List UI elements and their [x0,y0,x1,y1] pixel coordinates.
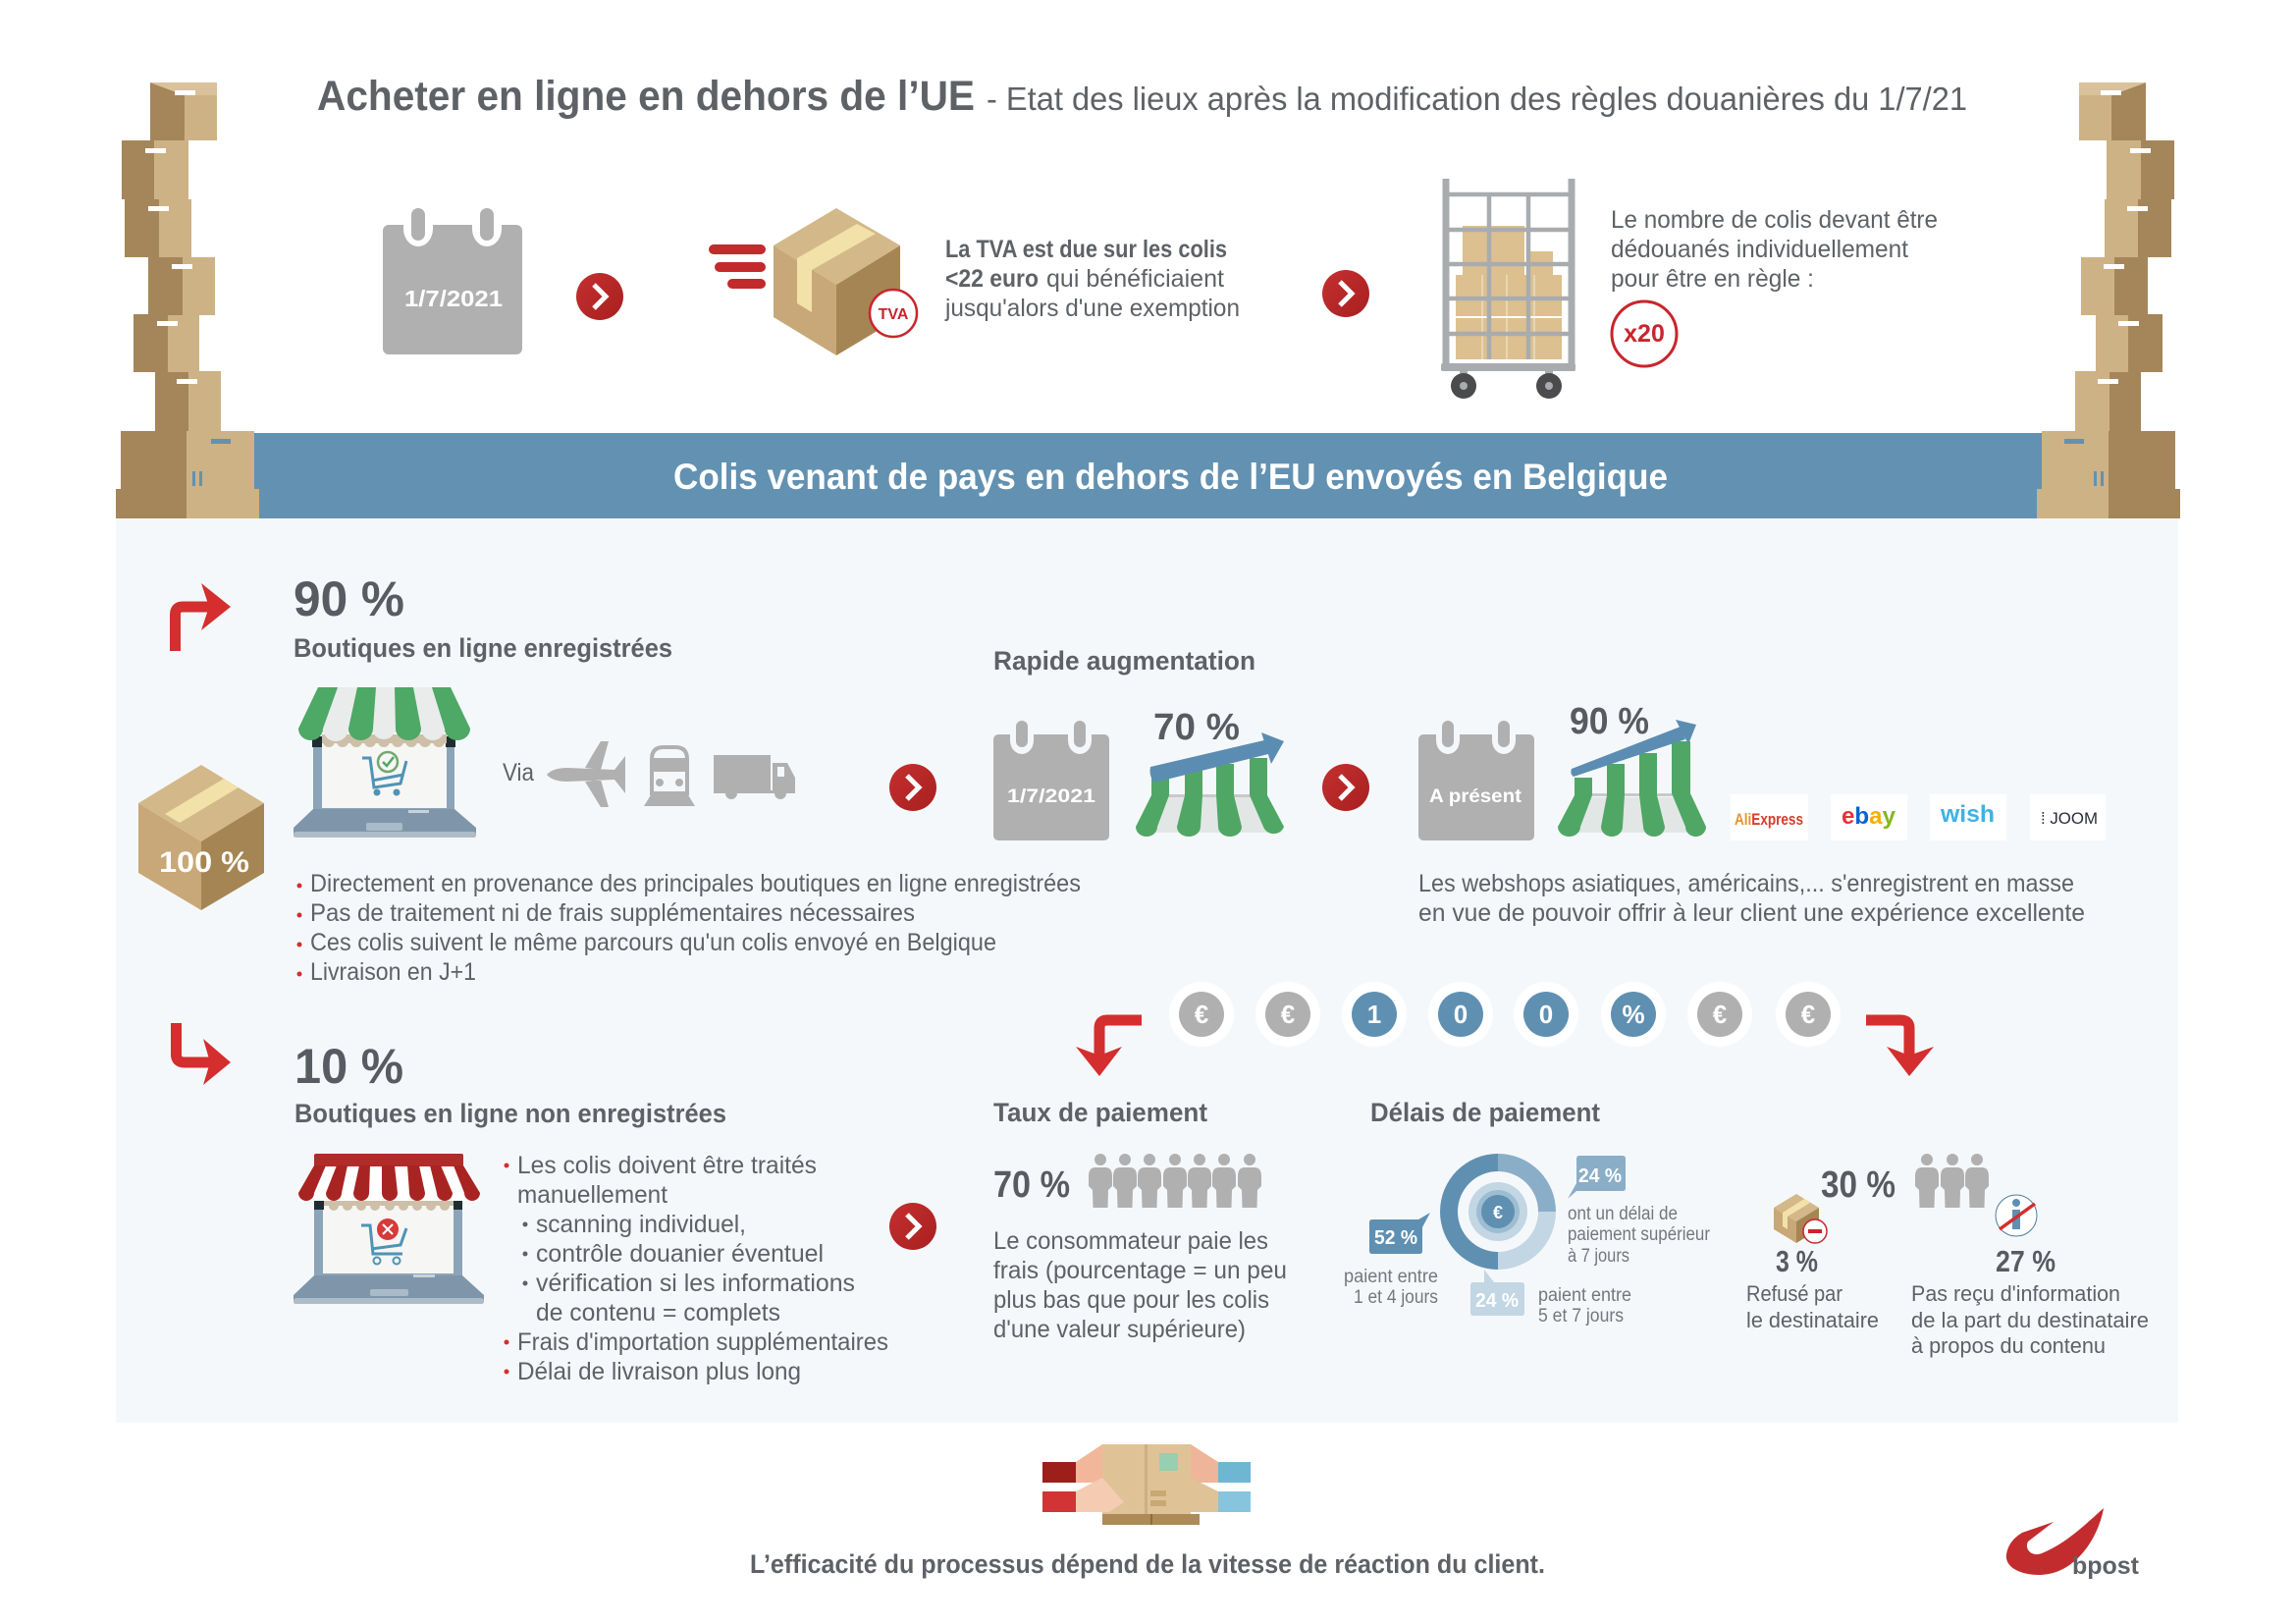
stat: 30 % people: 30 % [1821,1164,1896,1206]
arrow: red down then right [177,1023,231,1085]
stat: 27 % no information: Pas reçu d'information [1911,1281,2120,1306]
icon: calendar 1/7/2021: 1/7/2021 [404,286,503,311]
callout: 24 % longer than 7 days: 24 % [1578,1165,1622,1187]
text: list unregistered [505,1152,888,1385]
block: taux de paiement: 70 % [993,1164,1070,1206]
stat: 3 % refused: Refusé par [1746,1281,1842,1306]
heading: 90 % registered shops [294,571,672,663]
coins: 100 % row [1169,982,1841,1047]
stat: 30 % people [1821,1154,1989,1208]
text: nombre de colis: dédouanés individuellement [1611,236,1908,263]
icon: laptop store red awning [294,1154,484,1304]
logos: webshops: wish [1940,801,1995,828]
title: - Etat des lieux après la modification des règles douanières du 1/7/21 [987,81,1967,117]
text: list registered: Directement en provenance des principales boutiques en ligne enregistrées [310,870,1081,897]
text: list unregistered: Délai de livraison plus long [517,1358,801,1385]
callout: 52 %: paient entre [1344,1267,1438,1287]
icon: awning 70 % with arrow [1136,707,1284,837]
text: list unregistered: manuellement [517,1181,667,1209]
coins: 100 % row: € [1281,1000,1295,1029]
block: taux de paiement: d'une valeur supérieure) [993,1316,1246,1343]
heading: rapide augmentation: Rapide augmentation [993,646,1255,676]
text: webshops asiatiques [1418,870,2085,927]
icon: plane [547,741,625,807]
banner: colis venant de pays en dehors de l'EU: Colis venant de pays en dehors de l’EU envoyés en Belgique [673,457,1668,497]
block: taux de paiement [993,1098,1287,1343]
icon: speed lines [709,244,766,289]
icon: calendar a present [1418,721,1534,840]
callout: 52 % [1344,1213,1438,1308]
heading: delais de paiement: Délais de paiement [1370,1098,1600,1127]
coins: 100 % row: 0 [1539,1000,1553,1029]
coins: 100 % row: € [1713,1000,1727,1029]
banner: colis venant de pays en dehors de l'EU [250,433,2047,518]
stat: 27 % no information: 27 % [1996,1244,2056,1278]
icon: parcel 100 % [138,765,264,910]
icon: awning 90 % with arrow [1558,701,1706,837]
coins: 100 % row: € [1195,1000,1208,1029]
icon: laptop store green awning [294,687,476,838]
callout: 24 % longer than 7 days: paiement supérieur [1568,1224,1711,1245]
icon: right stack of boxes [2037,82,2180,518]
text: TVA explanation: La TVA est due sur les colis [945,236,1227,263]
icon: train [644,747,695,806]
logos: webshops: ebay [1842,803,1896,830]
chart: payment delay donut [1440,1154,1556,1270]
text: list unregistered: vérification si les informations [536,1270,855,1297]
callout: 52 %: 52 % [1374,1227,1417,1249]
arrow: red down-right [1866,1020,1934,1076]
icon: truck [714,755,795,799]
text: TVA explanation: <22 euro [945,265,1039,293]
arrow: red circle 5 [889,1203,936,1250]
icon: parcel 100 %: 100 % [159,846,249,879]
stat: 27 % no information [1911,1244,2149,1358]
logos: webshops: ⁞ JOOM [2041,809,2098,828]
text: list registered: Livraison en J+1 [310,958,476,986]
stat: 3 % refused: le destinataire [1746,1308,1879,1332]
icon: calendar 1/7/2021 small [993,721,1109,840]
callout: 24 % longer than 7 days: à 7 jours [1568,1246,1629,1267]
stat: 27 % no information: à propos du contenu [1911,1333,2106,1358]
heading: 90 % registered shops: Boutiques en ligne enregistrées [294,633,672,663]
icon: awning 90 % with arrow: 90 % [1570,701,1649,742]
icon: calendar 1/7/2021 small: 1/7/2021 [1007,786,1096,807]
icon: roll cage with parcels [1441,179,1575,399]
text: nombre de colis [1611,206,1938,293]
text: via: Via [503,759,534,786]
logo: bpost [2006,1508,2140,1580]
logos: webshops: AliExpress [1735,810,1803,829]
arrow: red circle 1 [576,273,623,320]
icon: no information [1996,1195,2037,1236]
block: taux de paiement: Le consommateur paie les [993,1227,1268,1255]
text: webshops asiatiques: Les webshops asiatiques, américains,... s'enregistrent en masse [1418,870,2074,897]
callout: 24 % 5 to 7 days [1470,1270,1631,1326]
text: list unregistered: scanning individuel, [536,1211,746,1238]
text: list unregistered: de contenu = complets [536,1299,780,1326]
text: TVA explanation: qui bénéficiaient [1046,265,1224,293]
title [317,73,1967,120]
stat: 27 % no information: de la part du destinataire [1911,1308,2149,1332]
block: taux de paiement: plus bas que pour les colis [993,1286,1269,1314]
icon: calendar a present: A présent [1429,786,1522,807]
icon: calendar 1/7/2021 [383,208,522,354]
text: list unregistered: Les colis doivent être traités [517,1152,817,1179]
text: nombre de colis: pour être en règle : [1611,265,1814,293]
chart: payment delay donut: € [1493,1203,1503,1222]
icon: refused parcel [1774,1194,1827,1243]
stat: 3 % refused [1746,1244,1879,1332]
badge: x20 [1612,301,1677,366]
arrow: red down-left [1076,1020,1142,1076]
panel: light background [116,518,2178,1423]
coins: 100 % row: € [1801,1000,1815,1029]
arrow: red circle 4 [1322,764,1369,811]
arrow: red circle 2 [1322,270,1369,317]
text: TVA explanation: jusqu'alors d'une exemption [944,295,1240,322]
title: Acheter en ligne en dehors de l’UE [317,73,975,120]
block: taux de paiement: Taux de paiement [993,1098,1207,1127]
arrow: red circle 3 [889,764,936,811]
callout: 24 % longer than 7 days [1568,1156,1711,1267]
text: list registered [296,870,1081,986]
icon: hands exchanging parcel [1042,1444,1251,1525]
logos: webshops [1731,794,2106,840]
heading: 10 % unregistered shops: 10 % [294,1039,403,1094]
heading: 10 % unregistered shops: Boutiques en ligne non enregistrées [294,1099,726,1128]
text: TVA explanation [944,236,1240,322]
icon: left stack of boxes [116,82,259,518]
heading: 90 % registered shops: 90 % [294,571,404,626]
callout: 52 %: 1 et 4 jours [1354,1287,1438,1308]
text: list unregistered: contrôle douanier éventuel [536,1240,824,1268]
callout: 24 % longer than 7 days: ont un délai de [1568,1204,1678,1224]
text: list unregistered: Frais d'importation supplémentaires [517,1328,888,1356]
icon: parcel with TVA badge: TVA [879,306,909,323]
text: list registered: Ces colis suivent le même parcours qu'un colis envoyé en Belgique [310,929,996,956]
text: nombre de colis: Le nombre de colis devant être [1611,206,1938,234]
badge: x20: x20 [1624,320,1665,348]
heading: 10 % unregistered shops [294,1039,726,1128]
callout: 24 % 5 to 7 days: 5 et 7 jours [1538,1306,1624,1326]
callout: 24 % 5 to 7 days: 24 % [1475,1290,1519,1312]
text: webshops asiatiques: en vue de pouvoir offrir à leur client une expérience excellente [1418,899,2085,927]
icon: parcel with TVA badge [774,208,917,355]
icon: awning 70 % with arrow: 70 % [1153,707,1240,748]
arrow: red up-right [175,583,231,651]
callout: 24 % 5 to 7 days: paient entre [1538,1285,1631,1306]
coins: 100 % row: 1 [1367,1000,1381,1029]
stat: 3 % refused: 3 % [1776,1244,1818,1278]
coins: 100 % row: 0 [1454,1000,1468,1029]
text: conclusion: L’efficacité du processus dépend de la vitesse de réaction du client. [750,1549,1545,1579]
coins: 100 % row: % [1622,1000,1645,1029]
text: list registered: Pas de traitement ni de frais supplémentaires nécessaires [310,899,915,927]
block: taux de paiement: frais (pourcentage = un peu [993,1257,1287,1284]
logo: bpost: bpost [2072,1552,2140,1580]
